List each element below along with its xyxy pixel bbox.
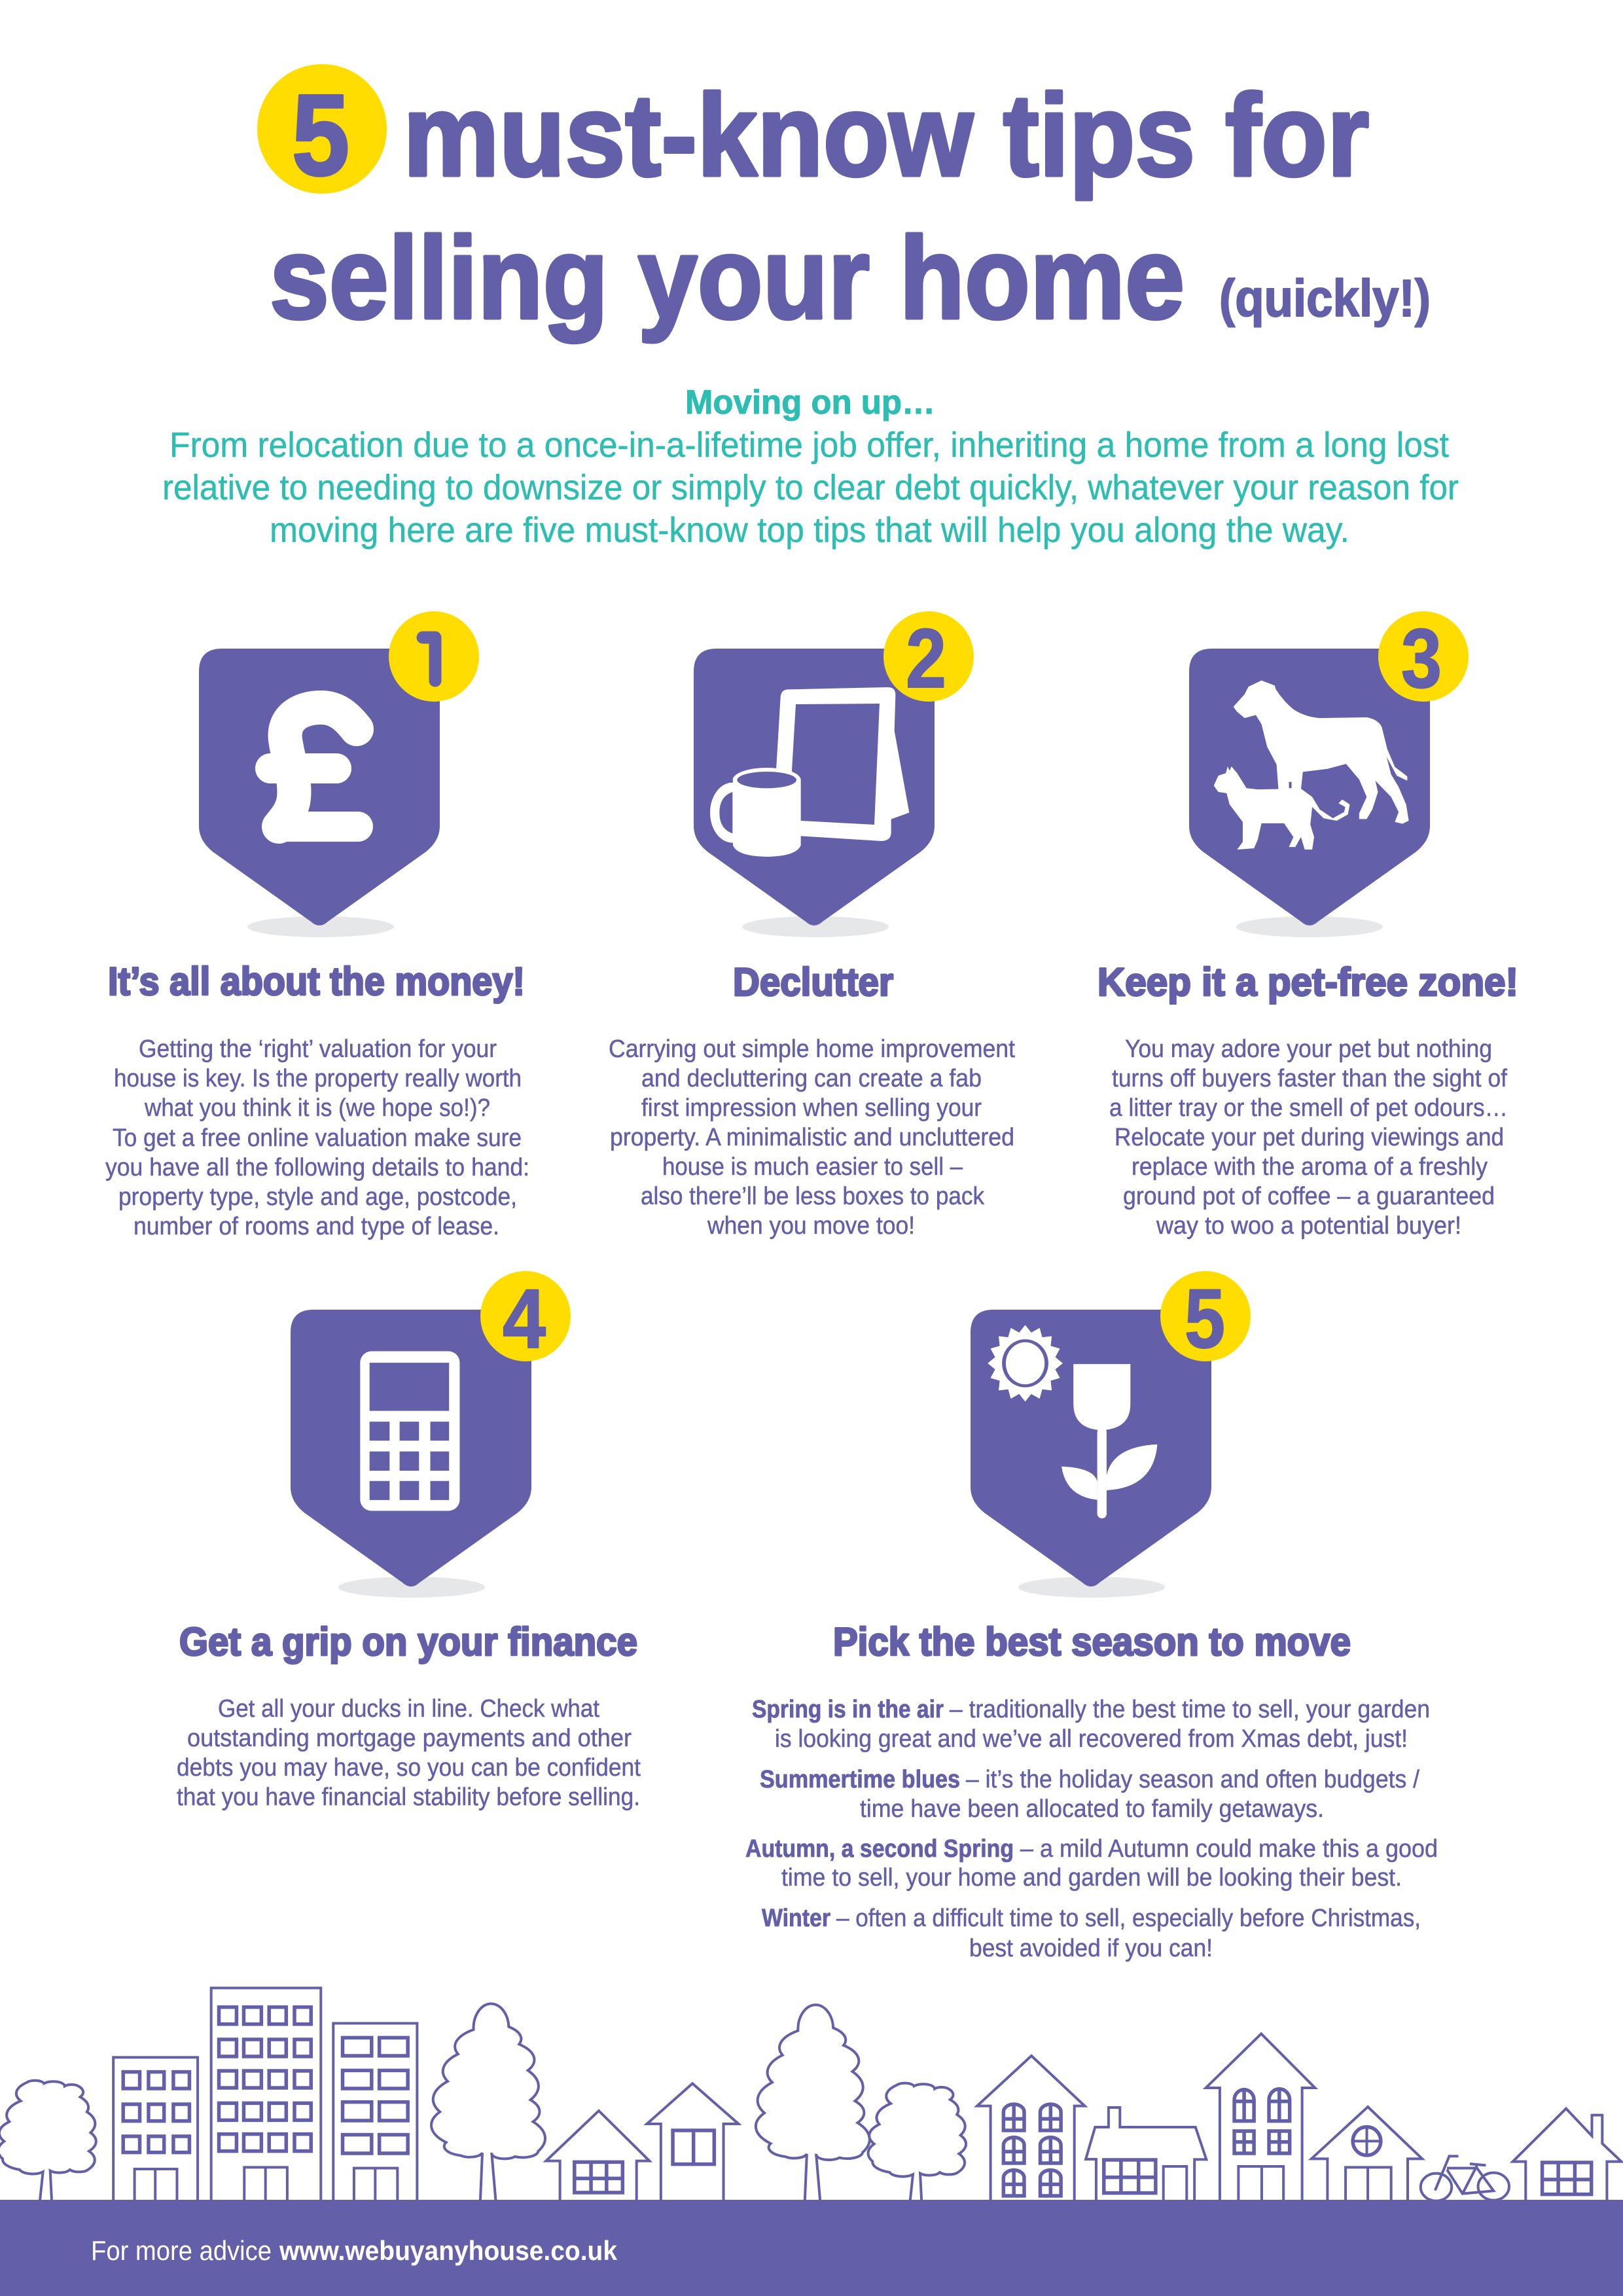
shield badge (291, 1310, 531, 1587)
heading: It’s all about the money! (108, 960, 525, 1003)
tree small centre (868, 2083, 966, 2204)
autumn: – a mild Autumn could make this a good (1020, 1835, 1438, 1863)
house I (1311, 2107, 1422, 2201)
spring: is looking great and we’ve all recovered from Xmas debt, just! (775, 1725, 1408, 1753)
spring: Spring is in the air (752, 1696, 944, 1723)
panel: tip 4 finance (177, 1271, 641, 1811)
body text (609, 1035, 1015, 1240)
autumn (745, 1835, 1438, 1892)
summer: time have been allocated to family getaways. (860, 1795, 1324, 1823)
apartment block B (211, 1988, 321, 2201)
body text (1109, 1035, 1508, 1240)
heading: Declutter (733, 960, 893, 1004)
body text: Carrying out simple home improvement (609, 1035, 1015, 1063)
tall tree left (431, 2003, 545, 2201)
icon: sun and flower (988, 1325, 1157, 1518)
summer: – it’s the holiday season and often budgets / (966, 1766, 1419, 1793)
number circle 4: 4 (503, 1272, 546, 1366)
body text: property. A minimalistic and uncluttered (610, 1124, 1014, 1151)
badge shadow (742, 916, 889, 937)
house E (647, 2083, 738, 2201)
body text: also there’ll be less boxes to pack (641, 1183, 985, 1210)
intro paragraph (162, 425, 1459, 550)
sun (988, 1325, 1063, 1401)
title line 2: selling your home (270, 213, 1185, 343)
bicycle (1421, 2156, 1509, 2201)
winter (762, 1905, 1421, 1962)
title number badge: 5 (292, 71, 349, 200)
icon: calculator (360, 1352, 459, 1511)
body text (177, 1695, 641, 1811)
shield badge (199, 649, 440, 925)
house D (546, 2111, 649, 2201)
tree small left (0, 2081, 96, 2201)
house F (977, 2056, 1085, 2201)
shield badge (971, 1310, 1211, 1587)
badge shadow (1236, 916, 1383, 937)
number circle 2 (883, 611, 974, 706)
number circle 5: 5 (1185, 1272, 1225, 1366)
autumn: Autumn, a second Spring (745, 1835, 1014, 1863)
number circle 3: 3 (1401, 612, 1442, 706)
body text (105, 1035, 529, 1240)
body text: replace with the aroma of a freshly (1132, 1153, 1488, 1181)
intro text block (162, 384, 1459, 550)
panel: tip 1 money (105, 611, 529, 1240)
spring: – traditionally the best time to sell, your garden (950, 1696, 1430, 1723)
title number badge (257, 64, 387, 200)
apartment block C (333, 2023, 417, 2201)
body text: what you think it is (we hope so!)? (144, 1094, 490, 1122)
intro paragraph: From relocation due to a once-in-a-lifetime job offer, inheriting a home from a long lost (169, 425, 1449, 465)
badge shadow (247, 916, 394, 937)
tall tree centre (756, 2005, 870, 2202)
number circle 3 (1378, 611, 1469, 706)
panel: tip 5 best season (745, 1271, 1438, 1962)
body text: a litter tray or the smell of pet odours… (1109, 1094, 1508, 1122)
number circle 2: 2 (906, 612, 946, 706)
body text: outstanding mortgage payments and other (187, 1725, 632, 1752)
winter: – often a difficult time to sell, especially before Christmas, (836, 1905, 1421, 1932)
footer text: www.webuyanyhouse.co.uk (279, 2235, 618, 2266)
body text: Relocate your pet during viewings and (1115, 1124, 1504, 1151)
season text (745, 1696, 1438, 1962)
house H (1206, 2034, 1315, 2201)
intro heading: Moving on up… (685, 384, 935, 422)
title suffix: (quickly!) (1219, 269, 1431, 327)
intro paragraph: relative to needing to downsize or simply to clear debt quickly, whatever your reason for (162, 468, 1459, 507)
dog silhouette (1234, 681, 1409, 824)
number circle 5 (1160, 1271, 1251, 1366)
body text: you have all the following details to hand: (105, 1154, 529, 1181)
shield badge (694, 649, 935, 925)
title (257, 64, 1431, 343)
body text: way to woo a potential buyer! (1156, 1212, 1461, 1240)
title line 1: must-know tips for (403, 70, 1369, 200)
footer text: For more advice (91, 2235, 272, 2266)
house J (1513, 2109, 1622, 2201)
winter: best avoided if you can! (969, 1935, 1213, 1962)
body text: house is key. Is the property really worth (114, 1065, 522, 1092)
icon: pound sign (270, 708, 358, 827)
shield badge (1189, 649, 1430, 925)
skyline illustration (0, 1988, 1622, 2204)
body text: turns off buyers faster than the sight of (1112, 1065, 1507, 1092)
body text: ground pot of coffee – a guaranteed (1123, 1183, 1495, 1210)
house G (1086, 2108, 1206, 2201)
body text: debts you may have, so you can be confident (177, 1754, 641, 1782)
badge shadow (338, 1577, 485, 1598)
icon: dog and cat (1214, 681, 1409, 850)
number circle 4 (480, 1271, 571, 1366)
panel: tip 3 pet-free (1097, 611, 1518, 1240)
body text: when you move too! (707, 1212, 915, 1240)
body text: Getting the ‘right’ valuation for your (139, 1035, 497, 1063)
picture frame (776, 687, 909, 841)
body text: first impression when selling your (641, 1094, 982, 1122)
body text: property type, style and age, postcode, (118, 1183, 517, 1211)
autumn: time to sell, your home and garden will be looking their best. (781, 1864, 1402, 1892)
badge shadow (1018, 1577, 1165, 1598)
flower (1061, 1364, 1157, 1518)
mug (710, 768, 801, 857)
icon: frame and mug (710, 687, 909, 857)
number circle 1 (389, 611, 479, 702)
apartment block A (113, 2057, 198, 2201)
intro paragraph: moving here are five must-know top tips that will help you along the way. (270, 511, 1349, 550)
body text: number of rooms and type of lease. (134, 1213, 499, 1240)
summer: Summertime blues (760, 1766, 960, 1793)
heading: Keep it a pet-free zone! (1097, 960, 1518, 1004)
body text: house is much easier to sell – (662, 1153, 963, 1181)
footer bar (0, 2200, 1623, 2296)
body text: that you have financial stability before selling. (177, 1784, 640, 1811)
body text: To get a free online valuation make sure (113, 1124, 522, 1152)
body text: and decluttering can create a fab (641, 1065, 982, 1092)
body text: You may adore your pet but nothing (1125, 1035, 1492, 1063)
heading: Pick the best season to move (833, 1620, 1351, 1664)
footer text (91, 2235, 618, 2266)
summer (760, 1766, 1419, 1823)
cat silhouette (1214, 766, 1350, 850)
body text: Get all your ducks in line. Check what (218, 1695, 599, 1723)
right half of street (868, 2034, 1622, 2204)
panel: tip 2 declutter (609, 611, 1015, 1240)
spring (752, 1696, 1430, 1753)
ground band (0, 2200, 1623, 2296)
heading: Get a grip on your finance (179, 1620, 637, 1664)
winter: Winter (762, 1905, 830, 1932)
